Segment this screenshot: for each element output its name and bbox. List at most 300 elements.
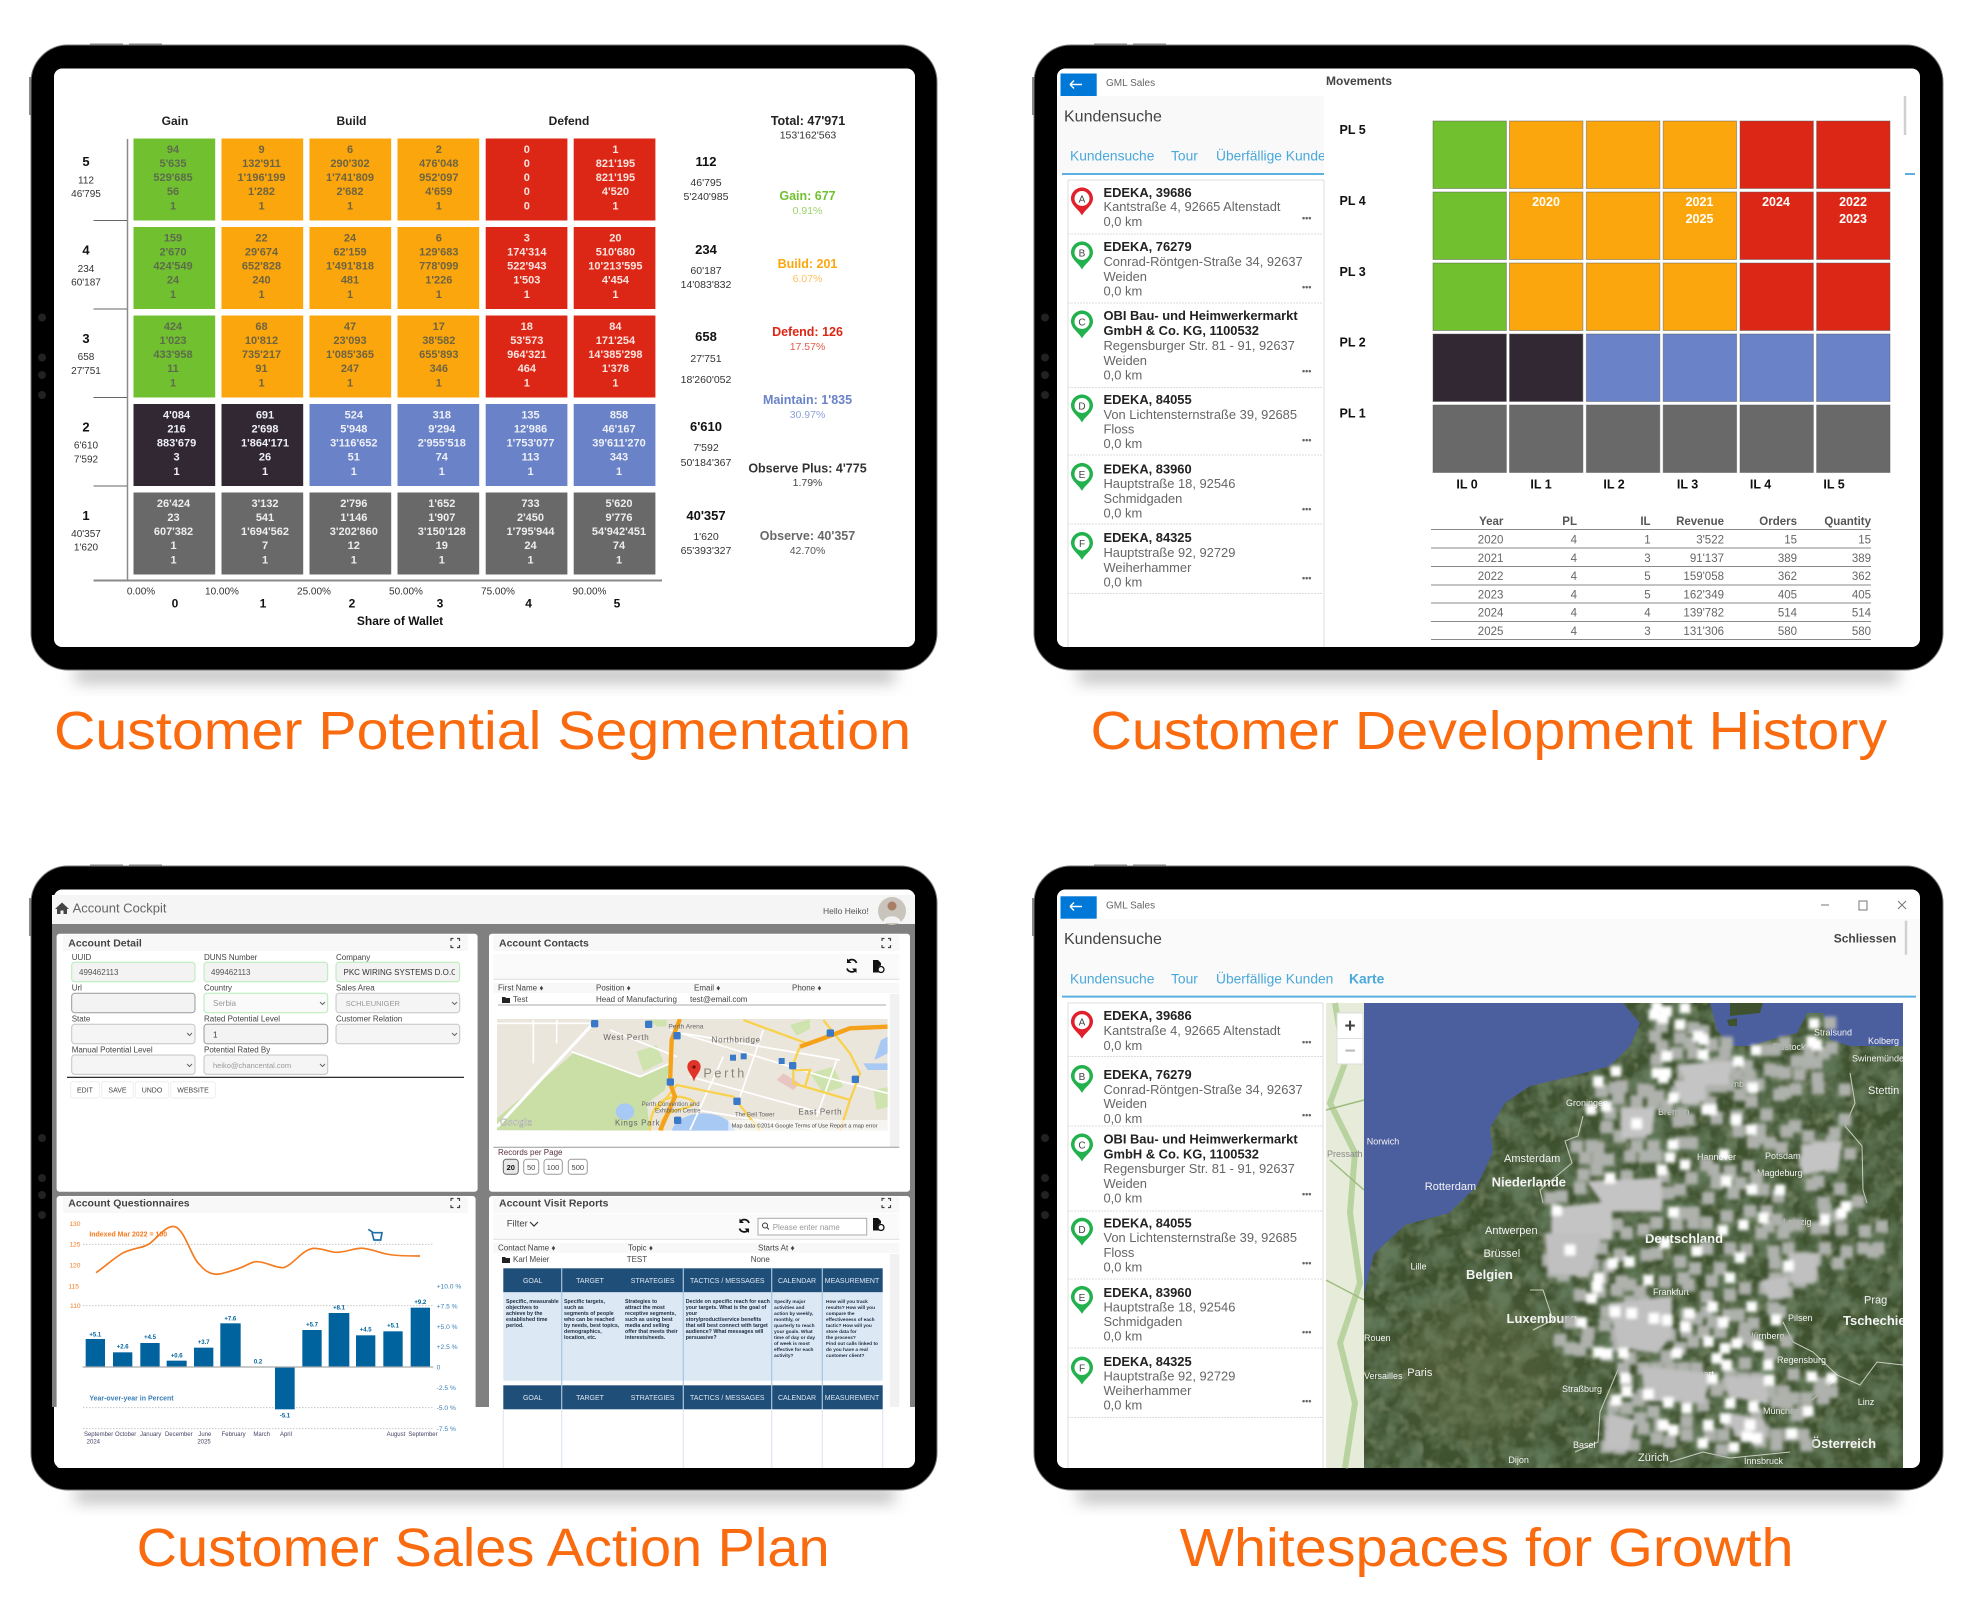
matrix row 3: 247 <box>341 363 359 375</box>
list item C: OBI Bau- und Heimwerkermarkt <box>1104 308 1298 323</box>
matrix row 1: 2'450 <box>517 512 544 524</box>
marketing plan table: tactic? How will you <box>826 1323 872 1329</box>
app header and tabs: GML Sales <box>1106 900 1155 912</box>
list item F: Weiherhammer <box>1104 560 1192 575</box>
matrix row 4: 424'549 <box>153 260 193 272</box>
form buttons: WEBSITE <box>177 1088 209 1094</box>
map street strip <box>1326 1003 1364 1468</box>
panel: account visit reports <box>489 1196 910 1468</box>
matrix row 2: 39'611'270 <box>592 438 646 450</box>
potential level labels: 46'795 <box>71 189 101 200</box>
city and country labels: Swinemünde <box>1852 1054 1904 1064</box>
segment summary column: Defend: 126 <box>772 325 843 339</box>
tabs: Kundensuche <box>1070 148 1155 164</box>
chart: price index and bars: -5.0 % <box>437 1405 456 1412</box>
list item E <box>1071 462 1311 520</box>
PL labels <box>1340 123 1366 420</box>
matrix row 5: 821'195 <box>596 158 635 170</box>
city and country labels: Stralsund <box>1814 1028 1852 1038</box>
matrix row 3: 1 <box>524 378 530 390</box>
chart: price index and bars: September <box>408 1432 438 1438</box>
list item E: 0,0 km <box>1104 506 1142 520</box>
list item B <box>1071 1065 1311 1126</box>
list item D: EDEKA, 84055 <box>1104 392 1192 407</box>
segment summary column: Build: 201 <box>778 257 837 271</box>
movement table: 131'306 <box>1683 626 1724 638</box>
share of wallet axis: 50.00% <box>389 586 423 598</box>
share of wallet axis: 5 <box>614 596 621 610</box>
matrix row 4: 29'674 <box>245 246 279 258</box>
row totals column: 6'610 <box>690 419 722 434</box>
matrix row 1: 1 <box>262 554 268 566</box>
panel: customer sales action plan tablet <box>29 864 937 1502</box>
movement table: 91'137 <box>1690 553 1724 565</box>
row totals column: 14'083'832 <box>681 279 732 291</box>
movement table: 5 <box>1644 571 1651 583</box>
matrix row 1: 3'202'860 <box>330 526 378 538</box>
bars <box>86 1308 430 1409</box>
potential level labels: 112 <box>78 176 94 186</box>
PL labels: PL 2 <box>1340 336 1366 350</box>
list item E: Schmidgaden <box>1104 1314 1182 1329</box>
marketing plan table: attract the most <box>625 1305 665 1311</box>
marketing plan table: activities and <box>774 1305 804 1311</box>
matrix row 1: 5'620 <box>605 498 633 510</box>
matrix row 1: 1'907 <box>428 512 455 524</box>
map zoom control: + <box>1344 1016 1356 1037</box>
search and action icons: Please enter name <box>773 1223 840 1232</box>
share of wallet axis: 10.00% <box>205 586 239 598</box>
panel: account detail <box>57 934 478 1192</box>
list item F <box>1071 1354 1311 1412</box>
city and country labels: Österreich <box>1811 1436 1876 1451</box>
marketing plan table: audience? What messages will <box>686 1329 764 1335</box>
panel: customer development history tablet <box>1032 44 1943 682</box>
matrix row 3: 433'958 <box>153 349 193 361</box>
matrix row 5: 0 <box>524 200 530 212</box>
movement table: 3'522 <box>1696 534 1724 546</box>
movement table: IL <box>1640 516 1651 528</box>
matrix row 4: 522'943 <box>507 260 546 272</box>
list item A: Kantstraße 4, 92665 Altenstadt <box>1104 1023 1281 1038</box>
list item A: A <box>1079 1018 1086 1029</box>
matrix row 2: 2'698 <box>251 424 279 436</box>
panel: account questionnaires <box>57 1196 476 1468</box>
movement table: 4 <box>1571 571 1578 583</box>
movement grid: 2020 <box>1532 195 1560 209</box>
movement table: 15 <box>1784 534 1797 546</box>
list item D: D <box>1078 1225 1086 1236</box>
potential level labels <box>71 154 101 554</box>
matrix row 5: 1'741'809 <box>326 172 374 184</box>
city and country labels: Magdeburg <box>1757 1168 1803 1178</box>
city and country labels: Hamburg <box>1720 1079 1757 1089</box>
tabs: Karte <box>1349 972 1385 986</box>
matrix row 5: 1 <box>258 200 265 212</box>
movement grid: 2021 <box>1686 195 1713 209</box>
list item B <box>1071 239 1311 298</box>
matrix row 4: 2'670 <box>159 246 187 258</box>
row totals column: 5'240'985 <box>684 191 729 203</box>
matrix row 3: 464 <box>518 363 537 375</box>
movement table: PL <box>1562 516 1577 528</box>
city and country labels: Basel <box>1573 1440 1596 1450</box>
matrix row 4: 24 <box>167 274 180 286</box>
row totals column: 40'357 <box>686 508 726 523</box>
matrix row 3: 735'217 <box>242 349 281 361</box>
matrix row 2: 318 <box>433 410 451 422</box>
marketing plan table: by needs, best topics, <box>564 1323 620 1329</box>
matrix row 5: 1 <box>612 144 618 156</box>
matrix row 5: 1 <box>612 200 618 212</box>
form fields: DUNS Number <box>204 953 258 962</box>
list item C: OBI Bau- und Heimwerkermarkt <box>1104 1132 1298 1146</box>
heading: customer potential segmentation: Customer Potential Segmentation <box>54 701 911 761</box>
city and country labels: Dijon <box>1508 1455 1529 1465</box>
map: Perth: Perth Convention and <box>642 1102 700 1108</box>
share of wallet axis: 90.00% <box>573 586 607 598</box>
matrix row 5: 1'282 <box>248 186 275 198</box>
movement table: 2020 <box>1478 534 1503 546</box>
list item B: B <box>1079 248 1086 260</box>
chart: price index and bars: +8.1 <box>333 1305 346 1311</box>
matrix row 4: 174'314 <box>507 246 547 258</box>
matrix row 5: 4'520 <box>602 186 629 198</box>
movement table: 162'349 <box>1683 590 1724 602</box>
city and country labels: Pilsen <box>1788 1313 1813 1323</box>
list item C: Regensburger Str. 81 - 91, 92637 <box>1104 1161 1295 1176</box>
row totals column: 18'260'052 <box>681 374 732 386</box>
form fields: 499462113 <box>211 968 251 977</box>
city and country labels: Nürnberg <box>1747 1331 1785 1341</box>
segment summary column: 42.70% <box>790 545 825 557</box>
marketing plan table: TACTICS / MESSAGES <box>690 1278 765 1285</box>
matrix row 3: 1 <box>436 378 442 390</box>
list item C: Regensburger Str. 81 - 91, 92637 <box>1104 338 1295 353</box>
marketing plan table: who can be reached <box>563 1317 615 1323</box>
matrix row 1: 733 <box>521 498 540 510</box>
matrix row 2: 2'955'518 <box>418 438 466 450</box>
potential level labels: 60'187 <box>71 278 101 288</box>
marketing plan table: Strategies to <box>625 1299 658 1305</box>
matrix row 4: 10'213'595 <box>588 260 642 272</box>
segmentation matrix headings: Build <box>336 114 366 128</box>
matrix row 1 <box>134 492 655 574</box>
segment summary column: 0.91% <box>793 205 822 217</box>
form buttons: UNDO <box>142 1088 163 1094</box>
list item F: EDEKA, 84325 <box>1104 530 1192 545</box>
movement table: 405 <box>1852 590 1871 602</box>
list item C <box>1071 308 1311 382</box>
marketing plan table: Specify major <box>774 1299 806 1305</box>
map: Perth: Perth <box>703 1066 747 1080</box>
matrix row 4: 24 <box>344 232 357 244</box>
potential level labels: 27'751 <box>71 366 101 377</box>
list item F: 0,0 km <box>1104 574 1142 590</box>
list item E: Hauptstraße 18, 92546 <box>1104 1300 1235 1314</box>
tabs: Tour <box>1171 972 1198 986</box>
matrix row 4: 510'680 <box>596 246 635 258</box>
list item A: EDEKA, 39686 <box>1104 1008 1192 1023</box>
city and country labels: Lille <box>1410 1262 1427 1272</box>
form fields: SCHLEUNIGER <box>346 999 400 1008</box>
movement table: 4 <box>1571 608 1578 620</box>
list item C: 0,0 km <box>1104 368 1142 382</box>
panel: account visit reports: Account Visit Reports <box>499 1198 609 1210</box>
movement table: 580 <box>1778 626 1797 638</box>
chart: price index and bars: 0.2 <box>254 1359 263 1365</box>
land masses <box>1364 1003 1903 1468</box>
matrix row 4: 129'683 <box>419 246 458 258</box>
matrix row 2: 3'116'652 <box>330 438 378 450</box>
movement grid: 2023 <box>1839 212 1867 226</box>
matrix row 1: 1 <box>170 540 177 552</box>
cockpit top bar: Account Cockpit <box>73 900 167 916</box>
city and country labels: Niederlande <box>1492 1174 1566 1190</box>
movement table: 3 <box>1644 553 1651 565</box>
matrix row 2 <box>134 404 655 486</box>
movement table: 580 <box>1852 626 1871 638</box>
matrix row 1: 1 <box>170 554 177 566</box>
list item D: EDEKA, 84055 <box>1104 1216 1192 1230</box>
matrix row 2: 74 <box>436 452 449 464</box>
list item F: Hauptstraße 92, 92729 <box>1104 1368 1235 1384</box>
list item D: Von Lichtensternstraße 39, 92685 <box>1104 407 1297 422</box>
matrix row 3: 91 <box>255 363 268 375</box>
list item D <box>1071 392 1311 451</box>
city and country labels: Stuttgart <box>1680 1369 1715 1379</box>
marketing plan table: your targets. What is the goal of <box>686 1305 767 1311</box>
PL labels: PL 4 <box>1340 194 1366 208</box>
panel: account visit reports: TEST <box>627 1255 647 1264</box>
list item C: ••• <box>1302 1189 1311 1199</box>
form fields: Company <box>336 953 370 962</box>
list item C: 0,0 km <box>1104 1190 1142 1206</box>
window controls <box>1821 901 1906 910</box>
matrix row 3: 17 <box>433 321 445 333</box>
chart: price index and bars: +2.5 % <box>437 1344 458 1351</box>
list item C: GmbH & Co. KG, 1100532 <box>1104 323 1259 338</box>
matrix row 5: 0 <box>524 158 530 170</box>
map: Perth: The Bell Tower <box>735 1113 774 1119</box>
tablet bezel <box>29 864 937 1490</box>
chart: price index and bars: 2024 <box>87 1439 101 1445</box>
movement table: 389 <box>1778 553 1797 565</box>
matrix row 4: 1 <box>612 289 618 301</box>
app header and tabs: Kundensuche <box>1064 931 1162 948</box>
PL labels: PL 3 <box>1340 265 1366 279</box>
matrix row 4: 1 <box>347 289 353 301</box>
panel: whitespaces for growth tablet <box>1032 864 1943 1502</box>
customer list <box>1068 1008 1323 1418</box>
matrix row 5: 94 <box>167 144 180 156</box>
panel: customer potential segmentation tablet <box>29 44 937 682</box>
matrix row 3: 1'378 <box>602 363 629 375</box>
list item B: Conrad-Röntgen-Straße 34, 92637 <box>1104 1082 1303 1097</box>
list item E: EDEKA, 83960 <box>1104 1285 1192 1300</box>
chart: price index and bars: +7.6 <box>224 1317 237 1323</box>
panel: account contacts: Records per Page <box>498 1148 563 1157</box>
map pin <box>687 1060 701 1082</box>
marketing plan table: achieve by the <box>506 1311 543 1317</box>
list item A <box>1071 1008 1311 1053</box>
matrix row 1: 12 <box>348 540 360 552</box>
app name: GML Sales <box>1106 78 1155 89</box>
matrix row 2: 135 <box>521 410 540 422</box>
matrix row 3: 53'573 <box>510 335 543 347</box>
movement table: 4 <box>1571 590 1578 602</box>
list item F: F <box>1079 1364 1085 1375</box>
city and country labels: Linz <box>1858 1397 1875 1407</box>
movement table: 4 <box>1571 626 1578 638</box>
marketing plan table: such as using best <box>625 1317 673 1323</box>
chart: price index and bars: 130 <box>69 1221 81 1228</box>
movement table: 5 <box>1644 590 1651 602</box>
matrix row 2: 216 <box>167 424 186 436</box>
form fields: Serbia <box>213 999 237 1008</box>
segmentation matrix headings: Defend <box>549 114 589 128</box>
marketing plan table: STRATEGIES <box>631 1395 675 1402</box>
panel: account visit reports: Topic ♦ <box>628 1244 653 1253</box>
matrix row 2: 858 <box>610 410 628 422</box>
matrix row 2: 1 <box>174 466 180 478</box>
tabs <box>1071 972 1384 986</box>
matrix row 3: 1 <box>612 378 618 390</box>
matrix row 2: 691 <box>256 410 274 422</box>
panel: account visit reports: Starts At ♦ <box>758 1244 795 1253</box>
list item F: 0,0 km <box>1104 1398 1142 1412</box>
potential level labels: 234 <box>78 264 95 275</box>
marketing plan table: offer that meets their <box>625 1329 678 1335</box>
list item F: Hauptstraße 92, 92729 <box>1104 545 1235 560</box>
matrix row 2: 9'294 <box>428 424 456 436</box>
potential level labels: 3 <box>82 331 90 346</box>
matrix row 1: 23 <box>167 512 180 524</box>
matrix row 4: 159 <box>164 232 182 244</box>
matrix row 5: 821'195 <box>596 172 635 184</box>
records per page buttons <box>503 1159 587 1174</box>
form buttons: SAVE <box>108 1088 127 1094</box>
list item E: Hauptstraße 18, 92546 <box>1104 476 1235 491</box>
marketing plan table: CALENDAR <box>778 1395 816 1402</box>
list item F: F <box>1079 539 1085 550</box>
matrix row 5: 1 <box>436 200 442 212</box>
matrix row 1: 7 <box>262 540 268 552</box>
panel: account contacts: Head of Manufacturing <box>596 995 677 1004</box>
list item C: Weiden <box>1104 353 1147 368</box>
matrix row 4: 6 <box>436 232 442 244</box>
movement table: 514 <box>1778 608 1798 620</box>
list item B: Conrad-Röntgen-Straße 34, 92637 <box>1104 254 1303 269</box>
tablet shadow <box>75 668 895 682</box>
potential level labels: 7'592 <box>74 454 99 466</box>
list item A: Kantstraße 4, 92665 Altenstadt <box>1104 199 1281 214</box>
matrix row 3: 964'321 <box>507 349 546 361</box>
city and country labels: Belgien <box>1466 1267 1513 1282</box>
city and country labels: Brüssel <box>1484 1248 1520 1260</box>
marketing plan table: CALENDAR <box>778 1278 816 1285</box>
matrix row 5: 1 <box>170 200 176 212</box>
potential level labels: 658 <box>78 352 95 363</box>
toolbar icons <box>847 958 884 973</box>
list item C: ••• <box>1302 366 1311 376</box>
matrix row 3: 171'254 <box>596 335 636 347</box>
segment summary column: 17.57% <box>790 341 825 353</box>
records per page buttons: 20 <box>507 1163 515 1172</box>
city and country labels: Bremen <box>1658 1107 1690 1117</box>
matrix row 1: 74 <box>613 540 626 552</box>
chart: price index and bars: +3.7 <box>198 1340 210 1346</box>
matrix row 4: 1'491'818 <box>326 260 374 272</box>
map: Perth: Perth Arena <box>668 1023 704 1030</box>
matrix row 2: 1 <box>351 466 357 478</box>
list item B: ••• <box>1302 282 1311 292</box>
IL labels: IL 3 <box>1677 478 1698 492</box>
tablet bezel <box>29 44 937 670</box>
form buttons: EDIT <box>77 1088 94 1094</box>
PL labels: PL 1 <box>1340 406 1366 420</box>
matrix row 4: 4'454 <box>602 274 630 286</box>
city and country labels: Amsterdam <box>1504 1153 1560 1165</box>
tablet bezel <box>1032 864 1943 1490</box>
marketing plan table: interests/needs. <box>625 1335 666 1341</box>
movement table: Quantity <box>1824 516 1872 528</box>
map street strip: Pressath <box>1327 1149 1363 1159</box>
map: Perth: Exhibition Centre <box>655 1109 701 1115</box>
marketing plan table: established time <box>506 1317 548 1323</box>
matrix axes <box>94 139 662 581</box>
matrix row 5: 4'659 <box>425 186 452 198</box>
matrix row 4: 1 <box>258 289 265 301</box>
list item C: Weiden <box>1104 1176 1147 1191</box>
share of wallet axis: Share of Wallet <box>357 614 443 628</box>
marketing plan table: effective for each <box>774 1347 814 1353</box>
list item C <box>1071 1132 1311 1206</box>
matrix row 3: 23'093 <box>333 335 367 347</box>
form fields: Country <box>204 984 232 992</box>
matrix row 2: 26 <box>259 452 271 464</box>
list item E: Schmidgaden <box>1104 491 1182 506</box>
list item B: EDEKA, 76279 <box>1104 1067 1192 1082</box>
map: Perth: Map data ©2014 Google Terms of Use Report a map error <box>732 1122 878 1129</box>
form fields: Potential Rated By <box>204 1046 270 1054</box>
matrix row 2: 1'864'171 <box>241 438 289 450</box>
form fields: Url <box>72 984 82 992</box>
list item F: ••• <box>1302 573 1311 583</box>
chart: price index and bars: Year-over-year in Percent <box>89 1396 174 1403</box>
list item D: Floss <box>1104 422 1134 436</box>
IL labels: IL 1 <box>1530 478 1552 492</box>
matrix row 4: 240 <box>252 274 271 286</box>
cockpit top bar <box>52 895 915 925</box>
row totals column: 112 <box>696 154 716 169</box>
records per page buttons: 100 <box>547 1163 559 1172</box>
matrix row 1: 1'652 <box>428 498 455 510</box>
city and country labels: Luxemburg <box>1506 1311 1577 1326</box>
share of wallet axis <box>127 586 621 628</box>
matrix row 1: 541 <box>256 512 274 524</box>
form fields: Manual Potential Level <box>72 1046 153 1054</box>
matrix row 1: 1 <box>616 554 622 566</box>
movement table: 15 <box>1858 534 1871 546</box>
marketing plan table: your <box>686 1311 697 1317</box>
city and country labels: Regensburg <box>1777 1355 1826 1365</box>
matrix row 4: 1 <box>170 289 176 301</box>
matrix row 3: 1'085'365 <box>326 349 374 361</box>
movement table: 3 <box>1644 626 1651 638</box>
matrix row 1: 1 <box>527 554 534 566</box>
customer search sidebar <box>1057 74 1915 647</box>
